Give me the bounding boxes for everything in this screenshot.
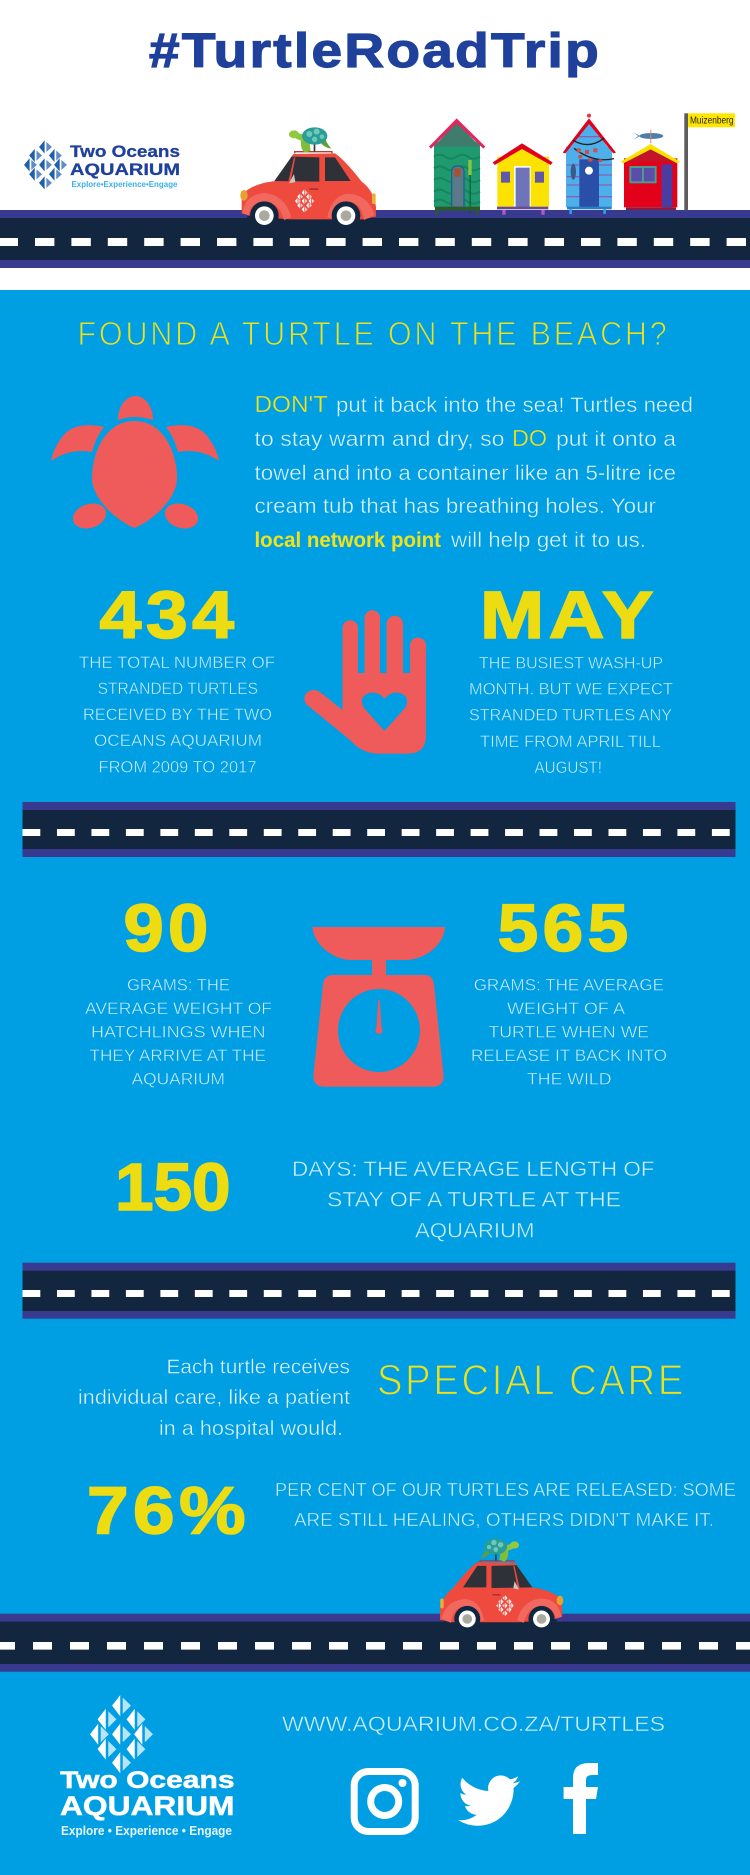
logo: Two Oceans Aquarium, header: AQUARIUM bbox=[70, 160, 180, 179]
logo: Two Oceans Aquarium, header: Two Oceans bbox=[70, 142, 180, 161]
caption: 434: FROM 2009 TO 2017 bbox=[98, 758, 256, 776]
caption: 90 bbox=[85, 976, 272, 1088]
text block: individual care bbox=[78, 1356, 350, 1440]
hut: blue with bunting bbox=[563, 114, 616, 214]
caption: 150 bbox=[292, 1158, 654, 1243]
text block: beach instructions: will help get it to us. bbox=[450, 529, 646, 552]
text block: beach instructions: local network point bbox=[254, 529, 441, 552]
stat: 565: 565 bbox=[498, 891, 633, 966]
beach huts illustration bbox=[429, 114, 680, 215]
caption: 565 bbox=[471, 976, 667, 1088]
logo: Two Oceans Aquarium, footer bbox=[60, 1695, 235, 1838]
icon: hand with heart bbox=[304, 610, 426, 754]
caption: 565: TURTLE WHEN WE bbox=[488, 1023, 649, 1042]
caption: 565: WEIGHT OF A bbox=[507, 999, 626, 1018]
heading: found a turtle: FOUND A TURTLE ON THE BEACH? bbox=[78, 315, 670, 352]
caption: 150: AQUARIUM bbox=[415, 1220, 534, 1243]
icon: turtle bbox=[51, 396, 219, 533]
hut: red with fish vane bbox=[621, 130, 680, 210]
caption: MAY bbox=[469, 654, 673, 777]
hut: yellow bbox=[493, 143, 553, 215]
icon: facebook bbox=[564, 1763, 598, 1834]
text block: beach instructions: cream tub that has breathing holes. Your bbox=[254, 495, 656, 518]
caption: 565: RELEASE IT BACK INTO bbox=[471, 1046, 667, 1065]
caption: 76% bbox=[275, 1479, 736, 1530]
caption: 90: AQUARIUM bbox=[132, 1069, 225, 1088]
logo: Two Oceans Aquarium, footer: Explore • Experience • Engage bbox=[61, 1823, 232, 1838]
caption: 150: DAYS: THE AVERAGE LENGTH OF bbox=[292, 1158, 654, 1181]
text block: beach instructions: DO bbox=[512, 425, 547, 451]
logo: Two Oceans Aquarium, header: Explore•Experience•Engage bbox=[72, 179, 178, 189]
caption: 150: STAY OF A TURTLE AT THE bbox=[327, 1189, 621, 1212]
text block: individual care: individual care, like a patient bbox=[78, 1387, 350, 1409]
road divider 3 bbox=[0, 1614, 750, 1672]
caption: 434 bbox=[79, 653, 275, 776]
heading: special care: SPECIAL CARE bbox=[377, 1357, 686, 1405]
text block: beach instructions: to stay warm and dry, so bbox=[254, 428, 504, 451]
caption: MAY: MONTH. BUT WE EXPECT bbox=[469, 680, 673, 699]
stat: 76%: 76% bbox=[87, 1474, 250, 1548]
text block: beach instructions: put it onto a bbox=[556, 428, 676, 451]
sign label: Muizenberg bbox=[690, 116, 734, 126]
icon: red car with turtle on roof bbox=[240, 127, 376, 230]
logo: Two Oceans Aquarium, footer: Two Oceans bbox=[60, 1767, 234, 1794]
stat: 434: 434 bbox=[100, 578, 238, 653]
caption: 90: AVERAGE WEIGHT OF bbox=[85, 999, 272, 1018]
icon: twitter bbox=[458, 1775, 520, 1826]
caption: 565: GRAMS: THE AVERAGE bbox=[474, 976, 664, 995]
road: header bbox=[0, 210, 750, 268]
text block: beach instructions: put it back into the sea! Turtles need bbox=[336, 394, 693, 417]
text block: individual care: in a hospital would. bbox=[159, 1418, 343, 1440]
hut: green bbox=[429, 118, 485, 215]
caption: 434: OCEANS AQUARIUM bbox=[94, 731, 262, 750]
text block: beach instructions: towel and into a container like an 5-litre ice bbox=[254, 462, 676, 485]
road divider 1 bbox=[22, 802, 736, 857]
caption: 76%: PER CENT OF OUR TURTLES ARE RELEASED: SOME bbox=[275, 1479, 736, 1500]
caption: 76%: ARE STILL HEALING, OTHERS DIDN'T MAKE IT. bbox=[294, 1509, 714, 1530]
road divider 2 bbox=[22, 1263, 736, 1319]
stat: 90: 90 bbox=[124, 891, 212, 966]
caption: MAY: AUGUST! bbox=[534, 758, 602, 777]
title: #TurtleRoadTrip bbox=[149, 25, 601, 78]
caption: 90: GRAMS: THE bbox=[127, 976, 230, 995]
caption: MAY: STRANDED TURTLES ANY bbox=[469, 706, 672, 725]
icon: instagram bbox=[354, 1772, 415, 1832]
caption: 90: HATCHLINGS WHEN bbox=[91, 1023, 266, 1042]
stat: 150: 150 bbox=[115, 1150, 231, 1225]
caption: 565: THE WILD bbox=[527, 1069, 612, 1088]
caption: 434: THE TOTAL NUMBER OF bbox=[79, 653, 275, 672]
text block: beach instructions: DON'T bbox=[254, 391, 328, 417]
caption: 434: RECEIVED BY THE TWO bbox=[83, 705, 272, 724]
signpost: Muizenberg bbox=[684, 113, 735, 210]
website url: WWW.AQUARIUM.CO.ZA/TURTLES bbox=[282, 1713, 665, 1736]
caption: MAY: TIME FROM APRIL TILL bbox=[480, 732, 661, 751]
logo: Two Oceans Aquarium, footer: AQUARIUM bbox=[60, 1791, 235, 1821]
header: white band bbox=[0, 0, 750, 290]
text block: individual care: Each turtle receives bbox=[166, 1356, 350, 1378]
stat: MAY: MAY bbox=[480, 578, 658, 653]
icon: weighing scale bbox=[312, 927, 445, 1087]
icon: red car with turtle, facing right bbox=[440, 1539, 563, 1632]
caption: MAY: THE BUSIEST WASH-UP bbox=[479, 654, 663, 673]
text block: beach instructions bbox=[254, 391, 693, 552]
logo: Two Oceans Aquarium, header bbox=[24, 140, 180, 189]
caption: 434: STRANDED TURTLES bbox=[98, 679, 258, 698]
caption: 90: THEY ARRIVE AT THE bbox=[90, 1046, 266, 1065]
